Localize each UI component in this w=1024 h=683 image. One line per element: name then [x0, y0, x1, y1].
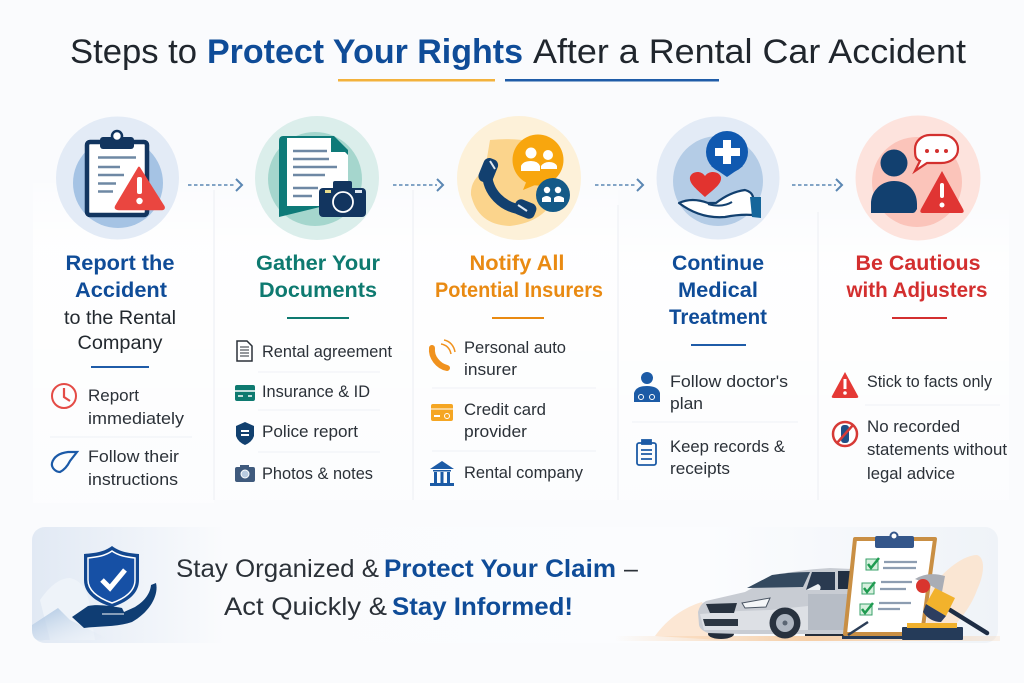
arrow 2 — [393, 179, 443, 191]
icon: phone and speech bubbles — [457, 116, 581, 240]
heading: step 3: Potential Insurers — [435, 279, 603, 302]
icon: documents camera — [255, 116, 379, 240]
banner text: Act Quickly & — [224, 593, 387, 621]
heading: step 5 — [846, 252, 988, 302]
heading: step 4 — [669, 252, 767, 329]
illustration: car — [698, 568, 852, 639]
heading: step 1: to the Rental — [64, 308, 176, 329]
list: step 5: legal advice — [867, 465, 955, 483]
icon: clipboard alert — [56, 116, 179, 240]
list: step 3 — [430, 339, 596, 486]
list: step 1: immediately — [88, 410, 185, 428]
list: step 1: instructions — [88, 471, 178, 489]
icon: follow arrow — [52, 452, 77, 472]
list: step 4: receipts — [670, 460, 730, 478]
icon: bank — [430, 461, 454, 486]
title: Protect Your Rights — [207, 33, 523, 71]
list: step 3: insurer — [464, 361, 518, 379]
heading: step 2 — [256, 252, 380, 302]
icon: doctor — [634, 372, 660, 402]
heading: step 3: Notify All — [470, 252, 564, 275]
list: step 3: provider — [464, 423, 528, 441]
heading: step 5: Be Cautious — [856, 252, 980, 275]
list: step 1: Follow their — [88, 448, 180, 466]
list: step 3: Personal auto — [464, 339, 566, 357]
banner text: Protect Your Claim — [384, 555, 616, 583]
icon: medical care hand — [656, 116, 780, 240]
icon: warning — [832, 372, 858, 398]
arrow 4 — [792, 179, 842, 191]
list: step 5: No recorded — [867, 418, 960, 436]
heading: step 4: Treatment — [669, 306, 767, 329]
list: step 4: plan — [670, 395, 703, 413]
list: step 2 — [235, 341, 392, 483]
list: step 4: Keep records & — [670, 438, 785, 456]
icon: shield in hand — [72, 546, 157, 628]
icon: no recording — [833, 422, 857, 446]
list: step 4 — [632, 372, 798, 478]
icon: person speech warning — [856, 116, 980, 240]
banner text: – — [624, 555, 638, 583]
banner text: Stay Informed! — [392, 593, 573, 621]
icon: camera — [235, 465, 255, 482]
title — [70, 33, 967, 71]
list: step 2: Rental agreement — [262, 343, 392, 361]
heading: step 4: Medical — [678, 279, 758, 302]
list: step 1 — [50, 384, 192, 489]
title underline — [338, 79, 719, 82]
illustration: ground and blob — [615, 555, 1000, 641]
list: step 5 — [832, 372, 1007, 483]
arrow 3 — [595, 179, 643, 191]
heading: step 1: Report the — [66, 252, 174, 275]
list: step 3: Rental company — [464, 464, 584, 482]
heading: step 2: Documents — [259, 279, 377, 302]
icon: orange phone — [432, 340, 455, 368]
list: step 2: Photos & notes — [262, 465, 373, 483]
banner text: Stay Organized & — [176, 555, 379, 583]
list: step 5: Stick to facts only — [867, 373, 993, 391]
arrow 1 — [188, 179, 242, 191]
icon: id card — [235, 385, 255, 401]
icon: credit card — [431, 404, 453, 421]
heading: step 5: with Adjusters — [846, 279, 988, 302]
heading: step 3 — [435, 252, 603, 302]
icon: document — [237, 341, 252, 361]
illustration: gavel — [842, 574, 987, 640]
heading: step 2: Gather Your — [256, 252, 380, 275]
icon: record clipboard — [637, 440, 656, 465]
list: step 2: Insurance & ID — [262, 383, 370, 401]
panel: bottom banner — [32, 527, 1000, 643]
heading: step 1: Accident — [75, 279, 167, 302]
heading: step 4: Continue — [672, 252, 764, 275]
panel: step cards — [33, 183, 1009, 503]
heading: step 1: Company — [78, 333, 163, 354]
list: step 5: statements without — [867, 441, 1007, 459]
title: After a Rental Car Accident — [533, 33, 967, 71]
illustration: clipboard checklist — [845, 532, 935, 635]
banner text — [176, 555, 638, 621]
list: step 4: Follow doctor's — [670, 373, 788, 391]
heading: step 1 — [64, 252, 176, 354]
list: step 2: Police report — [262, 423, 358, 441]
list: step 3: Credit card — [464, 401, 546, 419]
list: step 1: Report — [88, 387, 139, 405]
icon: police badge — [236, 422, 254, 445]
icon: clock — [52, 384, 76, 408]
title: Steps to — [70, 33, 197, 71]
